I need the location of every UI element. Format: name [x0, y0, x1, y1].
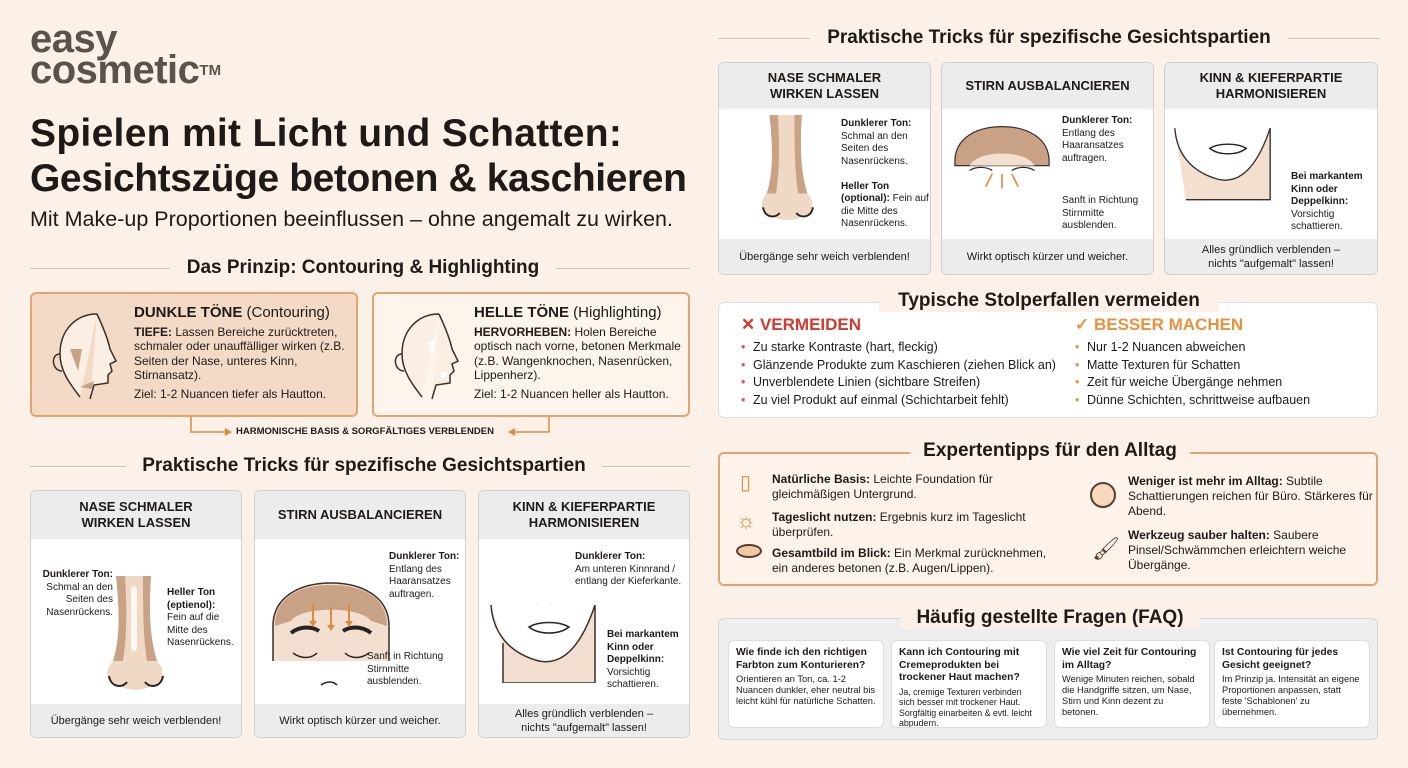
title	[30, 112, 687, 200]
label: dunkler ton kinn	[575, 551, 681, 587]
text: helle töne: Ziel: 1-2 Nuancen heller als Hautton.	[474, 386, 669, 400]
column: besser machen: Dünne Schichten, schrittweise aufbauen	[1087, 392, 1310, 406]
icon: face profile dark	[52, 313, 117, 400]
card: nase left: Übergänge sehr weich verblenden!	[51, 714, 221, 726]
icon: forehead right	[954, 126, 1050, 188]
arrow: connector: HARMONISCHE BASIS & SORGFÄLTIGES VERBLENDEN	[236, 426, 494, 437]
label: heller ton: Heller Ton (eptienol):	[167, 587, 215, 610]
faq 4	[1214, 640, 1370, 728]
faq 2: Kann ich Contouring mit Cremeprodukten bei trockener Haut machen?	[899, 647, 1020, 683]
logo: easy	[30, 17, 117, 61]
icon: lips	[736, 544, 762, 558]
card: nase left: WIRKEN LASSEN	[81, 515, 191, 530]
icon: bottle: ▯	[740, 472, 751, 494]
card: kinn left	[478, 490, 690, 738]
heading: praktische tricks right: Praktische Tricks für spezifische Gesichtspartien	[827, 27, 1271, 48]
title: Spielen mit Licht und Schatten:	[30, 112, 622, 155]
card: stirn right: STIRN AUSBALANCIEREN	[965, 78, 1130, 93]
card: kinn right	[1164, 62, 1378, 275]
labels: Dunklerer Ton: Entlang des Haaransatzes auftragen.	[1062, 115, 1132, 164]
faq 1: Wie finde ich den richtigen Farbton zum Konturieren?	[736, 647, 867, 670]
icon: brush: 🖌	[1092, 536, 1120, 561]
column: besser machen: Matte Texturen für Schatten	[1087, 358, 1240, 372]
faq 4: Im Prinzip ja. Intensität an eigene Proportionen anpassen, statt feste 'Schablonen' zu übernehmen.	[1222, 674, 1359, 717]
title: Gesichtszüge betonen & kaschieren	[30, 157, 687, 200]
label: dunkler ton: Schmal an den Seiten des Nasenrückens.	[46, 582, 113, 618]
faq 2: Ja, cremige Texturen verbinden sich besser mit trockener Haut. Sorgfältig einarbeiten & evtl. leicht abpudern.	[899, 686, 1032, 728]
labels: Heller Ton (optional): Fein auf die Mitte des Nasenrückens.	[841, 180, 929, 229]
card: stirn left	[254, 490, 466, 738]
panel: stolperfallen	[718, 302, 1378, 418]
logo: cosmeticTM	[30, 48, 221, 92]
tip 2: Tageslicht nutzen: Ergebnis kurz im Tageslicht überprüfen.	[772, 510, 1026, 539]
card: nase right: NASE SCHMALER	[768, 70, 881, 85]
icon: sun: ☼	[736, 508, 756, 533]
column: vermeiden: Zu starke Kontraste (hart, fleckig)	[753, 340, 938, 354]
column: besser machen: Nur 1-2 Nuancen abweichen	[1087, 340, 1245, 354]
faq 1: Orientieren an Ton, ca. 1-2 Nuancen dunkler, eher neutral bis leicht kühl für natürliche Schatten.	[736, 674, 876, 706]
heading: faq: Häufig gestellte Fragen (FAQ)	[916, 607, 1184, 628]
labels: Dunklerer Ton: Schmal an den Seiten des Nasenrückens.	[841, 118, 911, 166]
card: nase left	[30, 490, 242, 738]
text: dunkle töne: TIEFE: Lassen Bereiche zurücktreten, schmaler oder unauffälliger wirken (z.B. Seiten der Nase, unteres Kinn, Stirnansatz).	[134, 324, 345, 382]
panel: helle töne	[372, 292, 690, 417]
label: dunkler ton kinn: Dunklerer Ton:	[575, 551, 645, 562]
label: dunkler ton stirn	[389, 551, 459, 600]
panel: dunkle töne	[30, 292, 358, 417]
tip 1: Natürliche Basis: Leichte Foundation für gleichmäßigen Untergrund.	[772, 472, 993, 501]
text: dunkle töne	[134, 304, 345, 400]
heading: praktische tricks left: Praktische Tricks für spezifische Gesichtspartien	[142, 455, 586, 476]
column: vermeiden: Glänzende Produkte zum Kaschieren (ziehen Blick an)	[753, 358, 1056, 372]
icon: face profile light	[394, 313, 459, 400]
faq 3	[1054, 640, 1210, 728]
card: stirn left: Wirkt optisch kürzer und weicher.	[279, 714, 441, 726]
label: dunkler ton: Dunklerer Ton:	[43, 569, 113, 580]
card: kinn right: HARMONISIEREN	[1216, 86, 1326, 101]
heading: Expertentipps für den Alltag	[923, 440, 1177, 461]
label: Bei markantem Kinn oder Deppelkinn: Vorsichtig schattieren.	[1291, 171, 1363, 232]
icon: nose right	[762, 115, 814, 220]
card: kinn left: nichts "aufgemalt" lassen!	[521, 722, 647, 734]
heading: Typische Stolperfallen vermeiden	[898, 290, 1200, 311]
faq 3: Wenige Minuten reichen, sobald die Handgriffe sitzen, um Nase, Stirn und Kinn dezent zu betonen.	[1062, 674, 1195, 717]
arrow: connector	[190, 417, 550, 437]
icon: chin right	[1174, 128, 1271, 200]
panel: faq	[718, 618, 1378, 740]
text: helle töne: HERVORHEBEN: Holen Bereiche optisch nach vorne, betonen Merkmale (z.B. Wangenknochen, Nasenrücken, Lippenherz).	[474, 324, 681, 382]
text: helle töne	[474, 304, 681, 400]
column: besser machen	[1075, 315, 1310, 406]
subtitle: Mit Make-up Proportionen beeinflussen – ohne angemalt zu wirken.	[30, 207, 673, 231]
column: vermeiden: Zu viel Produkt auf einmal (Schichtarbeit fehlt)	[753, 392, 1009, 406]
tip 3: Gesamtbild im Blick: Ein Merkmal zurücknehmen, ein anderes betonen (z.B. Augen/Lippen).	[772, 546, 1046, 575]
panel: expertentipps	[718, 452, 1378, 586]
card: stirn right: Wirkt optisch kürzer und weicher.	[967, 250, 1128, 262]
label: heller ton: Fein auf die Mitte des Nasenrückens.	[167, 612, 234, 648]
labels	[841, 118, 929, 229]
icon: forehead	[272, 582, 390, 686]
icon: clock	[1090, 482, 1116, 508]
column: besser machen: ✓ BESSER MACHEN	[1075, 315, 1243, 334]
icon: chin	[490, 603, 596, 683]
label: markant: Bei markantem Kinn oder Deppelkinn: Vorsichtig schattieren.	[607, 629, 679, 690]
text: dunkle töne: DUNKLE TÖNE (Contouring)	[134, 304, 330, 321]
card: stirn right	[941, 62, 1154, 275]
faq 1	[728, 640, 884, 728]
faq 2	[891, 640, 1047, 728]
faq 4: Ist Contouring für jedes Gesicht geeignet?	[1222, 647, 1338, 670]
logo	[30, 17, 221, 92]
card: kinn right: KINN & KIEFERPARTIE	[1200, 70, 1342, 85]
label: heller ton	[167, 587, 234, 648]
card: nase right	[718, 62, 931, 275]
card: kinn left: HARMONISIEREN	[529, 515, 639, 530]
label: sanft: Sanft in Richtung Stirnmitte ausblenden.	[367, 651, 443, 687]
column: besser machen: Zeit für weiche Übergänge nehmen	[1087, 375, 1282, 389]
card: stirn right: Sanft in Richtung Stirnmitte ausblenden.	[1062, 195, 1138, 231]
card: nase left: NASE SCHMALER	[79, 499, 193, 514]
icon: nose	[107, 576, 164, 690]
card: kinn right: Alles gründlich verblenden –	[1202, 244, 1340, 256]
label: dunkler ton kinn: Am unteren Kinnrand / entlang der Kieferkante.	[575, 564, 681, 587]
card: stirn left: STIRN AUSBALANCIEREN	[278, 507, 442, 522]
tip 4: Weniger ist mehr im Alltag: Subtile Schattierungen reichen für Büro. Stärkeres für Abend.	[1128, 474, 1373, 518]
card: kinn left: Alles gründlich verblenden –	[515, 708, 653, 720]
text: dunkle töne: Ziel: 1-2 Nuancen tiefer als Hautton.	[134, 386, 326, 400]
column: vermeiden	[741, 315, 1056, 406]
label: dunkler ton stirn: Dunklerer Ton:	[389, 551, 459, 562]
tip 5: Werkzeug sauber halten: Saubere Pinsel/Schwämmchen erleichtern weiche Übergänge.	[1128, 528, 1346, 572]
heading: Das Prinzip: Das Prinzip: Contouring & Highlighting	[187, 257, 539, 278]
faq 3: Wie viel Zeit für Contouring im Alltag?	[1062, 647, 1196, 670]
column: vermeiden: Unverblendete Linien (sichtbare Streifen)	[753, 375, 980, 389]
label: dunkler ton stirn: Entlang des Haaransatzes auftragen.	[389, 564, 451, 600]
card: nase right: Übergänge sehr weich verblenden!	[739, 250, 910, 262]
text: helle töne: HELLE TÖNE (Highlighting)	[474, 304, 662, 321]
card: kinn right: nichts "aufgemalt" lassen!	[1208, 258, 1334, 270]
card: kinn left: KINN & KIEFERPARTIE	[513, 499, 655, 514]
card: nase right: WIRKEN LASSEN	[770, 86, 879, 101]
column: vermeiden: ✕ VERMEIDEN	[741, 315, 861, 334]
